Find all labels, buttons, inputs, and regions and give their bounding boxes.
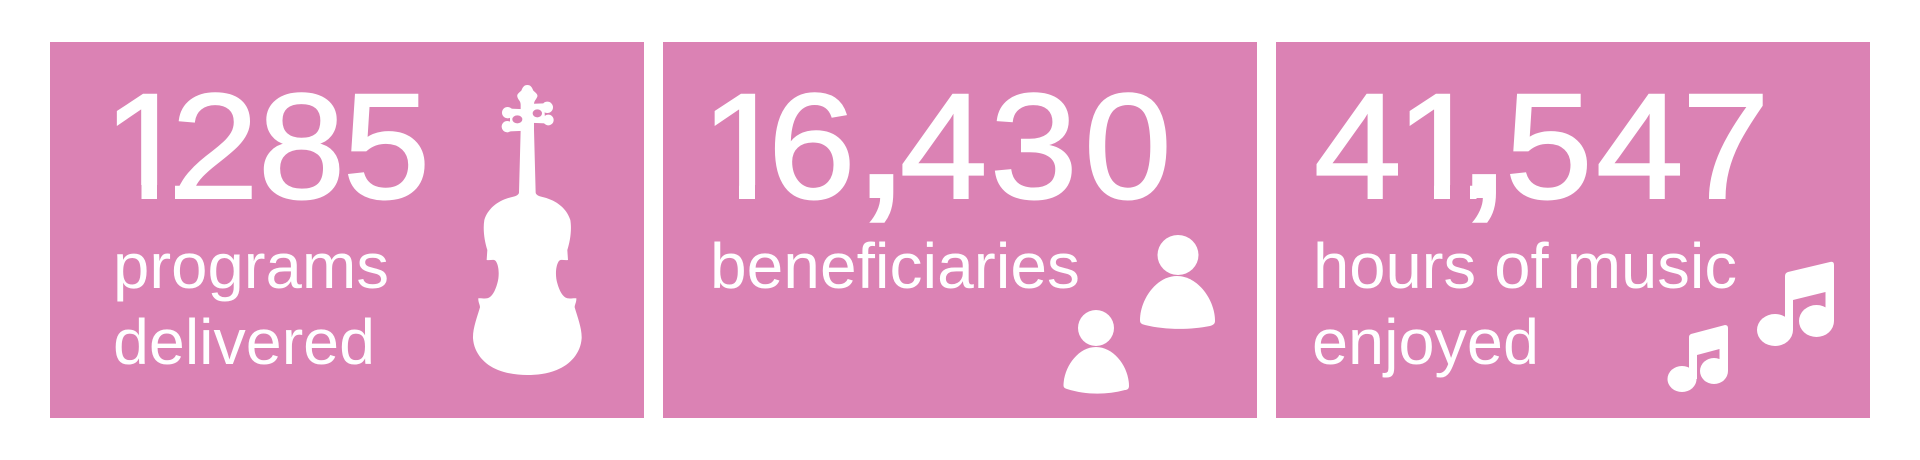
label: programs delivered — [113, 230, 389, 378]
statistic: 41,547: 41 — [1314, 62, 1483, 230]
label: hours of music enjoyed — [1312, 230, 1737, 378]
panel: hours of music — [1276, 42, 1870, 418]
statistic: 16,430: 16 — [701, 62, 856, 230]
label: hours of music enjoyed: hours of music — [1313, 230, 1737, 302]
icon: violin — [473, 85, 582, 375]
statistic: 1285: 1285 — [103, 62, 430, 230]
statistic: 16,430: , — [858, 53, 905, 232]
statistic: 41,547: , — [1461, 53, 1507, 232]
icon: small music note — [1668, 325, 1728, 392]
panel: beneficiaries — [663, 42, 1257, 418]
icon: large music note — [1757, 262, 1834, 346]
label: beneficiaries: beneficiaries — [710, 230, 1080, 302]
panel background — [1276, 42, 1870, 418]
panel: programs — [50, 42, 644, 418]
statistic: 16,430: 430 — [900, 62, 1172, 230]
icon: small person — [1064, 310, 1129, 394]
label: programs delivered: programs — [113, 230, 389, 302]
label: programs delivered: delivered — [113, 306, 375, 378]
icon: large person — [1140, 235, 1215, 329]
label: hours of music enjoyed: enjoyed — [1312, 306, 1539, 378]
panel background — [50, 42, 644, 418]
panel background — [663, 42, 1257, 418]
statistic: 41,547: 547 — [1505, 62, 1770, 230]
